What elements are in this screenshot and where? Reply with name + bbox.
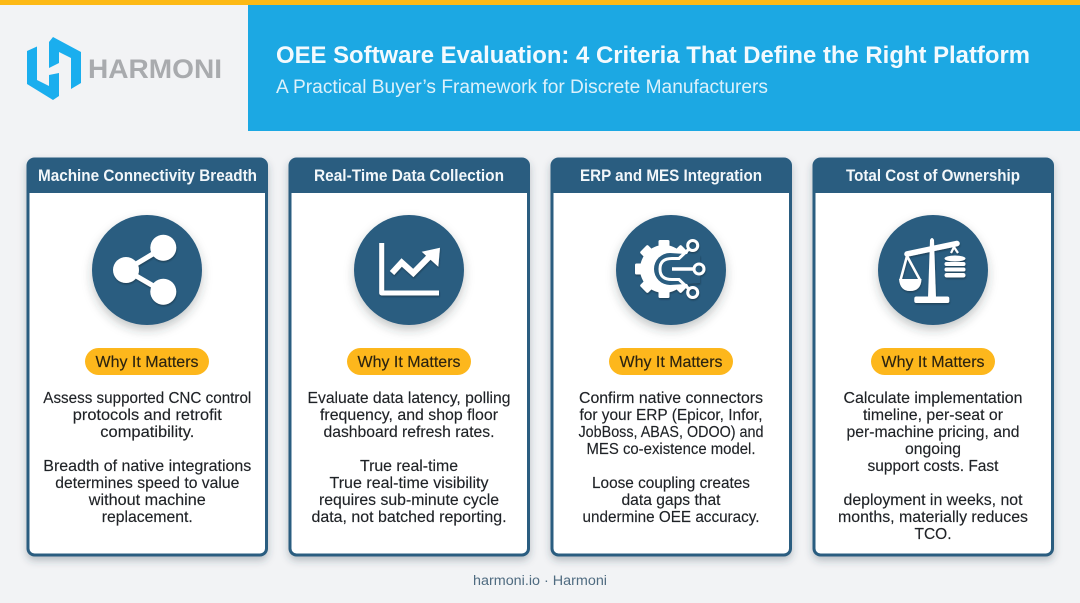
body text: without machine [88, 492, 206, 509]
badge: Why It Matters [85, 348, 209, 375]
body text: deployment in weeks, not [844, 492, 1023, 509]
icon: Harmoni hexagon mark [27, 37, 81, 100]
body text: True real-time [360, 458, 458, 475]
body text [578, 390, 764, 526]
body text: Loose coupling creates [592, 475, 750, 492]
body text: MES co-existence model. [586, 441, 756, 458]
body text: Evaluate data latency, polling [308, 390, 510, 407]
body text: Calculate implementation [844, 390, 1022, 407]
body text: frequency, and shop floor [320, 407, 499, 424]
body text: timeline, per-seat or [863, 407, 1004, 424]
body text: replacement. [102, 509, 193, 526]
logo [27, 37, 222, 100]
body text: for your ERP (Epicor, Infor, [580, 407, 762, 424]
badge: Why It Matters [347, 348, 471, 375]
body text: ongoing [905, 441, 961, 458]
card heading: Real-Time Data Collection [314, 167, 504, 185]
body text: dashboard refresh rates. [324, 424, 494, 441]
body text: support costs. Fast [868, 458, 999, 475]
card heading: Total Cost of Ownership [846, 167, 1020, 185]
subtitle: A Practical Buyer’s Framework for Discrete Manufacturers [276, 77, 768, 98]
body text: TCO. [914, 526, 952, 543]
body text: True real-time visibility [330, 475, 488, 492]
body text [308, 390, 510, 526]
title banner [248, 5, 1080, 131]
panel: Real-Time Data Collection [288, 158, 530, 556]
body text: per-machine pricing, and [846, 424, 1020, 441]
badge: Why It Matters: Why It Matters [96, 354, 198, 371]
card heading: Machine Connectivity Breadth [38, 167, 257, 185]
body text: data gaps that [622, 492, 721, 509]
body text [43, 390, 251, 526]
logo wordmark: HARMONI [88, 54, 222, 84]
badge: Why It Matters [609, 348, 733, 375]
body text: data, not batched reporting. [312, 509, 506, 526]
badge: Why It Matters: Why It Matters [620, 354, 722, 371]
panel: Total Cost of Ownership [812, 158, 1054, 556]
badge: Why It Matters: Why It Matters [358, 354, 460, 371]
panel: Machine Connectivity Breadth [26, 158, 268, 556]
badge: Why It Matters: Why It Matters [882, 354, 984, 371]
body text: protocols and retrofit [73, 407, 222, 424]
top accent bar [0, 0, 1080, 5]
body text: Confirm native connectors [579, 390, 763, 407]
icon: gear with circuit lines [616, 215, 726, 325]
panel: ERP and MES Integration [550, 158, 792, 556]
body text: determines speed to value [55, 475, 239, 492]
card heading: ERP and MES Integration [580, 167, 762, 185]
badge: Why It Matters [871, 348, 995, 375]
body text [838, 390, 1028, 543]
footer source line: harmoni.io · Harmoni [473, 573, 607, 588]
body text: months, materially reduces [838, 509, 1028, 526]
body text: Breadth of native integrations [43, 458, 251, 475]
title: OEE Software Evaluation: 4 Criteria That Define the Right Platform [276, 42, 1030, 69]
icon: rising line chart [354, 215, 464, 325]
icon: share network [92, 215, 202, 325]
icon: balance scale with coins [878, 215, 988, 325]
body text: undermine OEE accuracy. [582, 509, 760, 526]
body text: JobBoss, ABAS, ODOO) and [578, 424, 764, 441]
body text: requires sub-minute cycle [319, 492, 499, 509]
body text: Assess supported CNC control [43, 390, 251, 407]
body text: compatibility. [100, 424, 194, 441]
